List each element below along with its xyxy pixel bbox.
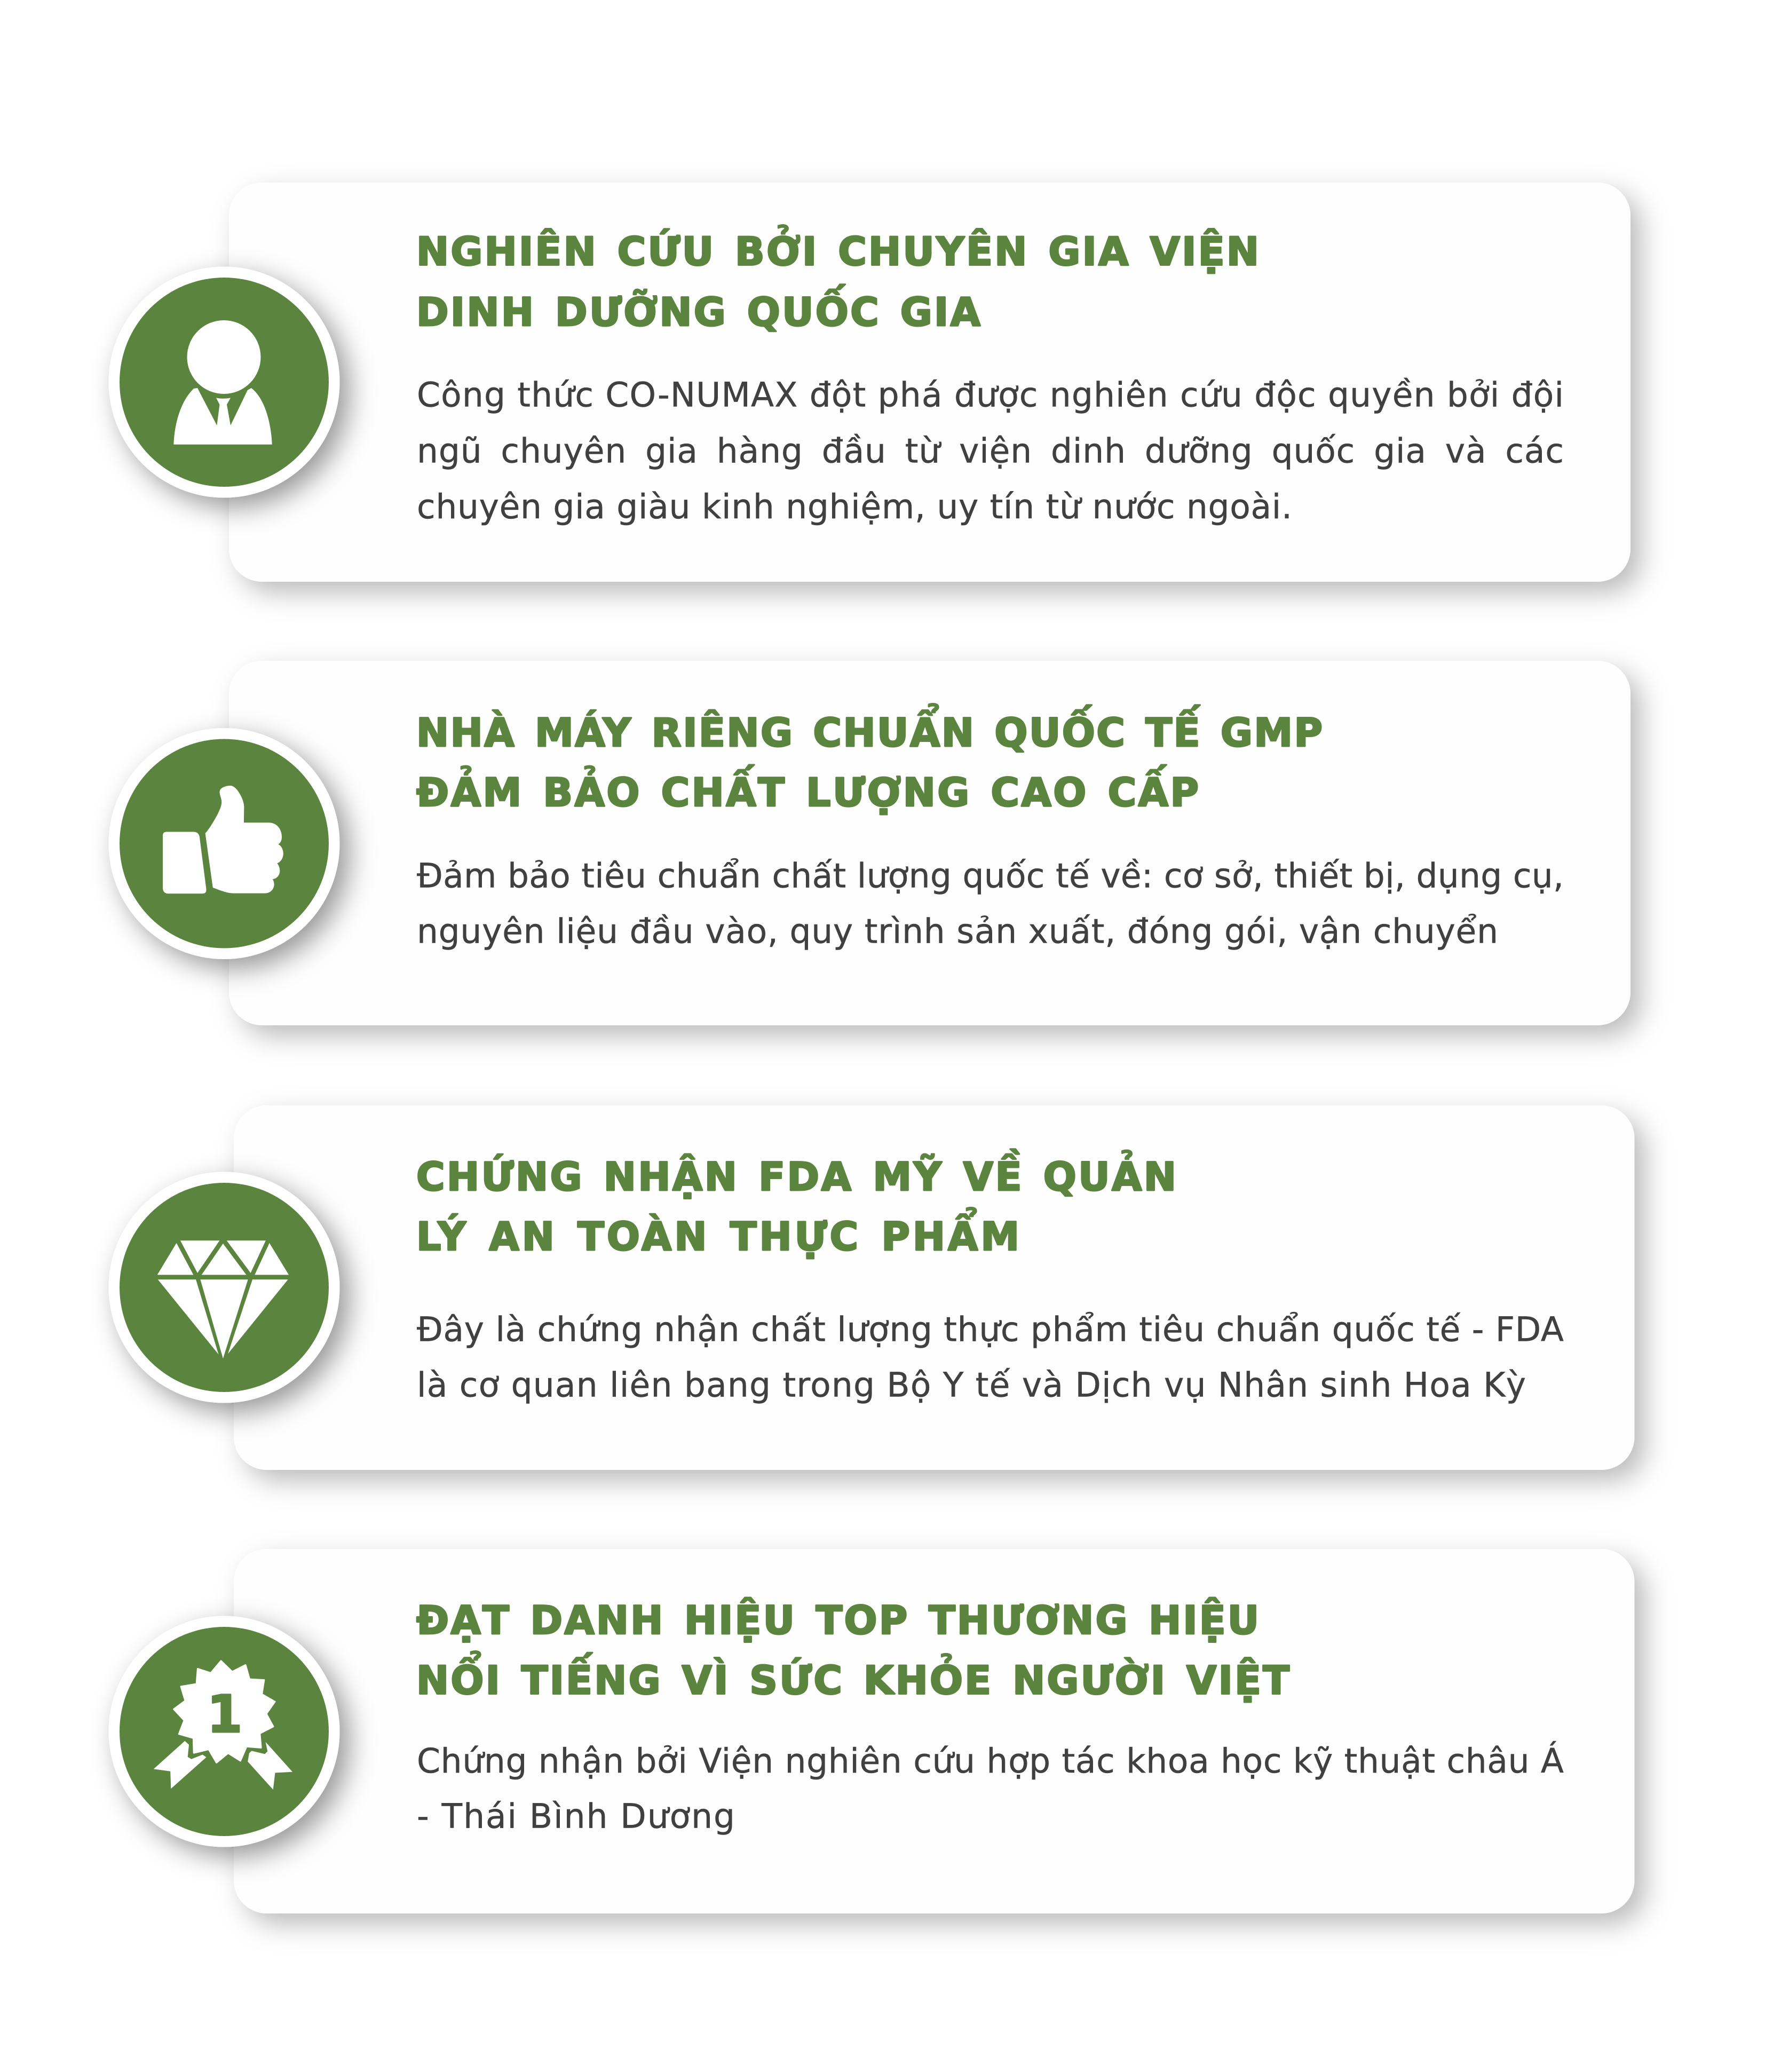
body text: card 4 [417,1741,1564,1836]
body text: card 4: Chứng nhận bởi Viện nghiên cứu hợp tác khoa học kỹ thuật châu Á [417,1741,1564,1781]
body text: card 2: nguyên liệu đầu vào, quy trình sản xuất, đóng gói, vận chuyển [417,912,1498,951]
heading: card 3 [416,1149,1176,1260]
body text: card 2: Đảm bảo tiêu chuẩn chất lượng quốc tế về: cơ sở, thiết bị, dụng cụ, [417,856,1564,895]
body text: card 1: ngũ chuyên gia hàng đầu từ viện dinh dưỡng quốc gia và các [417,431,1564,471]
heading: card 2: NHÀ MÁY RIÊNG CHUẨN QUỐC TẾ GMP [416,703,1323,756]
heading: card 3: LÝ AN TOÀN THỰC PHẨM [416,1207,1019,1260]
panel: card 3 [109,1105,1634,1470]
icon: expert person badge [109,267,339,497]
body text: card 3 [417,1310,1564,1405]
body text: card 4: - Thái Bình Dương [417,1797,735,1836]
icon: number one award badge: 1 [207,1685,242,1744]
icon: number one award badge [109,1616,339,1847]
card 3 background [234,1105,1634,1470]
icon: thumbs up badge [109,728,339,959]
body text: card 3: là cơ quan liên bang trong Bộ Y tế và Dịch vụ Nhân sinh Hoa Kỳ [417,1366,1526,1405]
heading: card 4 [416,1597,1289,1704]
icon: diamond badge [109,1172,339,1403]
body text: card 3: Đây là chứng nhận chất lượng thực phẩm tiêu chuẩn quốc tế - FDA [417,1310,1564,1349]
body text: card 1 [417,376,1564,526]
body text: card 1: Công thức CO-NUMAX đột phá được nghiên cứu độc quyền bởi đội [417,376,1564,414]
panel: card 4 [109,1549,1634,1913]
heading: card 4: ĐẠT DANH HIỆU TOP THƯƠNG HIỆU [416,1597,1259,1643]
panel: card 1 [109,183,1630,582]
panel: card 2 [109,661,1630,1025]
heading: card 1 [416,224,1259,335]
card 4 background [234,1549,1634,1913]
heading: card 4: NỔI TIẾNG VÌ SỨC KHỎE NGƯỜI VIỆT [416,1651,1289,1704]
body text: card 2 [417,856,1564,951]
heading: card 3: CHỨNG NHẬN FDA MỸ VỀ QUẢN [416,1149,1176,1200]
heading: card 1: DINH DƯỠNG QUỐC GIA [416,284,981,335]
heading: card 2: ĐẢM BẢO CHẤT LƯỢNG CAO CẤP [416,764,1199,816]
card 2 background [229,661,1630,1025]
heading: card 2 [416,703,1323,816]
card 1 background [229,183,1630,582]
heading: card 1: NGHIÊN CỨU BỞI CHUYÊN GIA VIỆN [416,224,1259,274]
body text: card 1: chuyên gia giàu kinh nghiệm, uy tín từ nước ngoài. [417,487,1292,526]
